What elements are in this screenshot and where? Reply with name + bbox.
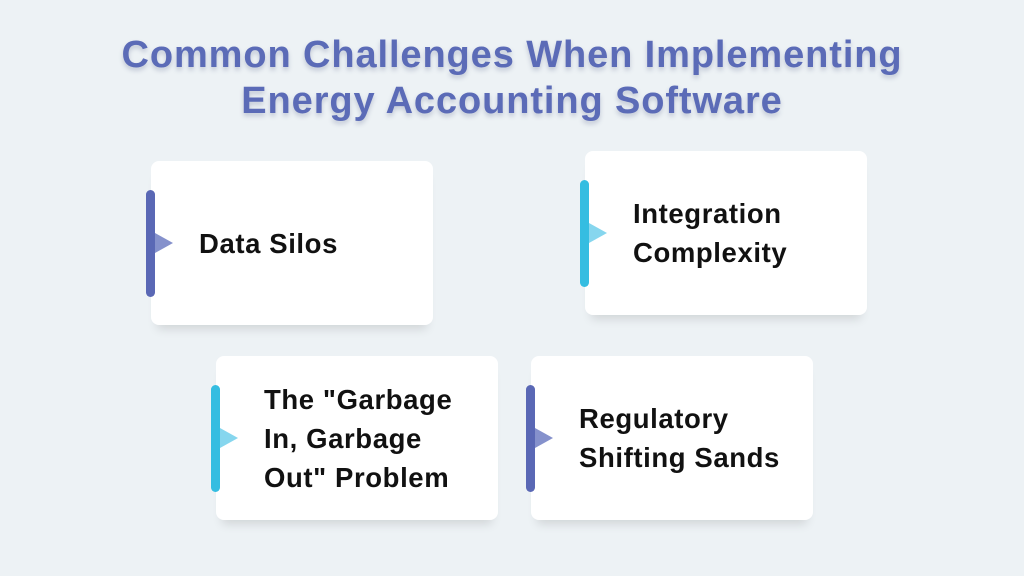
card: garbage in garbage out bbox=[216, 356, 498, 520]
card: garbage in garbage out: The "Garbage bbox=[264, 384, 452, 414]
card: data silos: Data Silos bbox=[199, 228, 338, 258]
title bbox=[121, 34, 902, 126]
title: Energy Accounting Software bbox=[241, 80, 783, 122]
card: regulatory shifting sands: Shifting Sands bbox=[579, 442, 780, 473]
card: integration complexity: Integration bbox=[633, 198, 782, 229]
title: Common Challenges When Implementing bbox=[122, 34, 902, 76]
card: garbage in garbage out: Out" Problem bbox=[264, 462, 449, 492]
card: integration complexity bbox=[585, 151, 867, 315]
card: regulatory shifting sands: Regulatory bbox=[579, 403, 729, 434]
card: regulatory shifting sands bbox=[531, 356, 813, 520]
card: garbage in garbage out: In, Garbage bbox=[264, 422, 422, 454]
card: data silos bbox=[151, 161, 433, 325]
card: integration complexity: Complexity bbox=[633, 237, 787, 268]
